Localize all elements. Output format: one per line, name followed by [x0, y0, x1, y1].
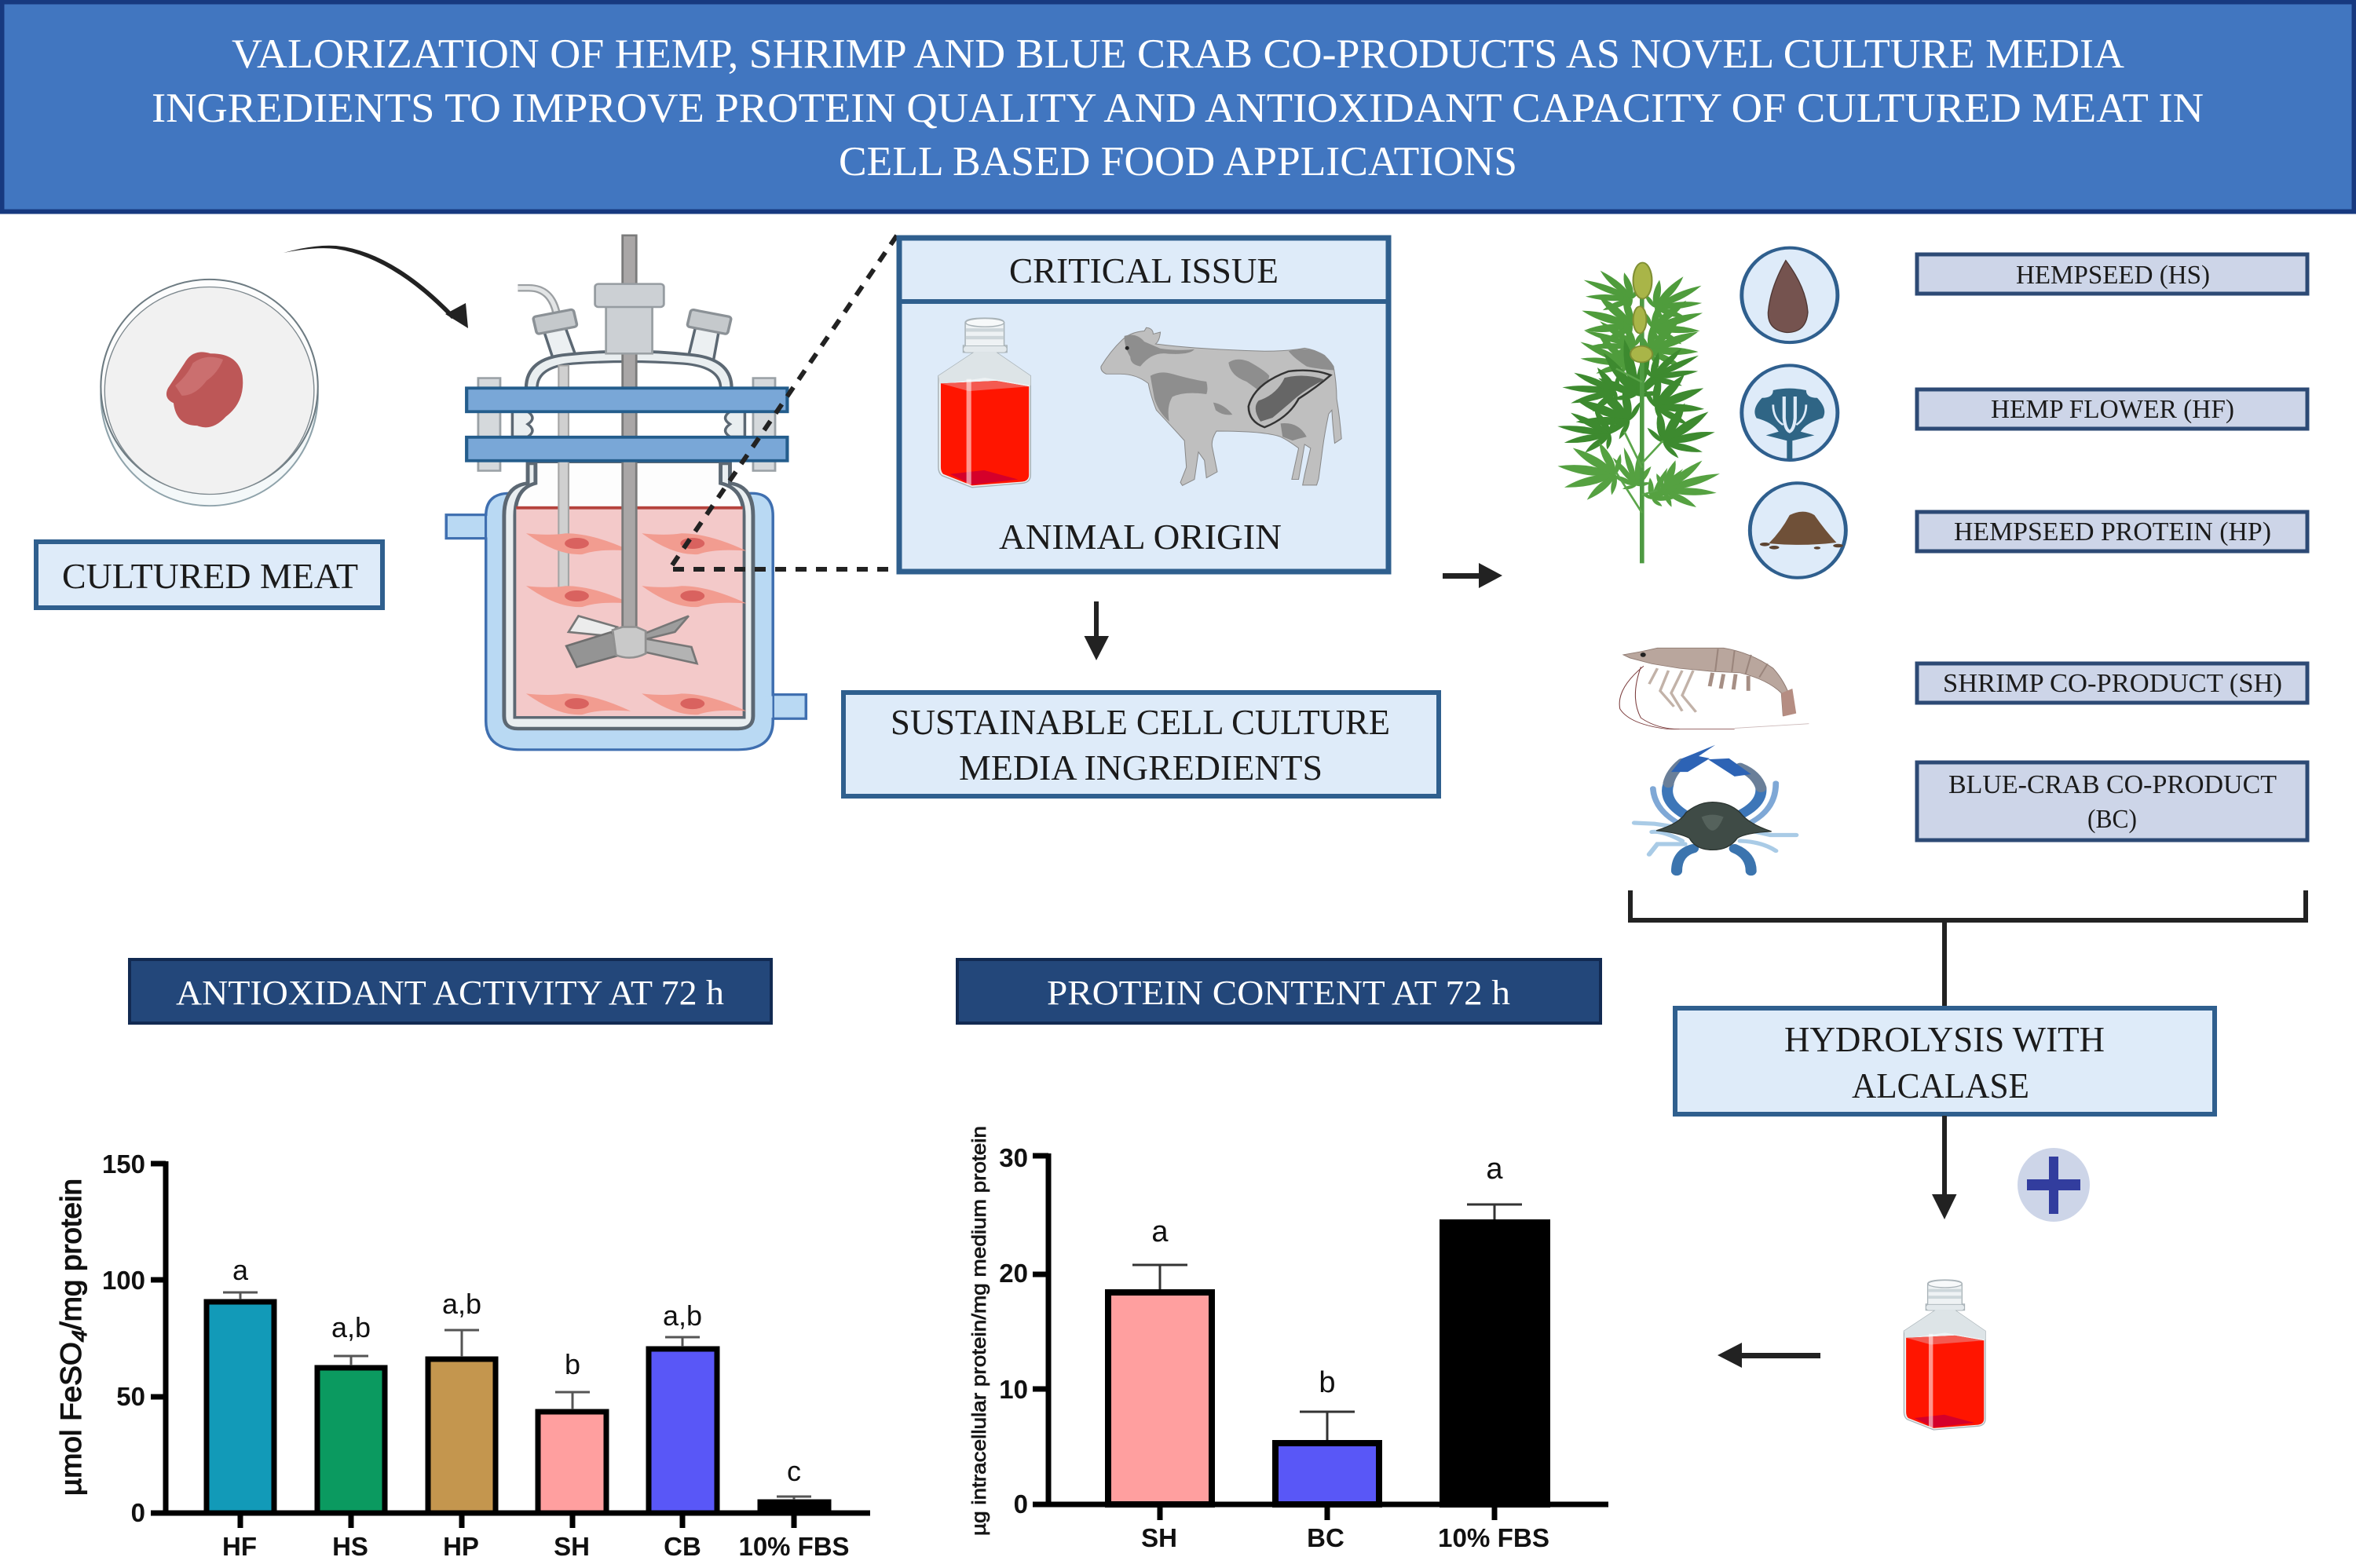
bracket joining sources	[1630, 890, 2306, 1007]
heading: critical issue: CRITICAL ISSUE	[1009, 250, 1279, 291]
y tick labels: 0	[1014, 1489, 1028, 1519]
y axis title: 4	[68, 1330, 91, 1342]
icon: petri dish with cultured meat	[101, 280, 318, 506]
axes	[1033, 1153, 1608, 1520]
y tick labels: 150	[102, 1150, 145, 1179]
icon: hempseed protein powder	[1750, 483, 1846, 578]
error bars	[223, 1292, 811, 1500]
label: hydrolysis with alcalase	[1675, 1008, 2215, 1114]
jacket	[446, 493, 806, 750]
dashed callout lines	[670, 236, 897, 569]
y tick labels: 30	[999, 1143, 1028, 1172]
significance letters: b	[565, 1348, 580, 1380]
label: shrimp co-product: SHRIMP CO-PRODUCT (SH)	[1943, 669, 2282, 698]
arrow: down to supplemented medium	[1932, 1116, 1957, 1219]
label: cultured meat	[36, 542, 382, 608]
icon: bioreactor	[446, 236, 806, 750]
arrow: down to sustainable ingredients	[1084, 601, 1109, 660]
y tick labels	[999, 1143, 1028, 1519]
label: shrimp co-product	[1917, 663, 2307, 703]
title banner: VALORIZATION OF HEMP, SHRIMP AND BLUE CRAB CO-PRODUCTS AS NOVEL CULTURE MEDIA	[232, 31, 2124, 77]
label: cultured meat: CULTURED MEAT	[62, 556, 358, 596]
significance letters: a,b	[663, 1299, 702, 1332]
label: hempseed protein: HEMPSEED PROTEIN (HP)	[1954, 517, 2271, 546]
heading: protein content	[957, 959, 1601, 1023]
flanges	[466, 388, 787, 411]
significance letters	[232, 1254, 801, 1487]
significance letters	[1151, 1153, 1503, 1399]
icon: supplemented medium bottle	[1904, 1280, 1985, 1430]
probe	[558, 366, 569, 590]
impeller	[569, 616, 617, 636]
shaft	[623, 236, 636, 631]
label: hempseed	[1917, 254, 2307, 294]
arrow: right to sources	[1443, 563, 1502, 588]
side port left	[518, 288, 557, 313]
y axis title: µg intracellular protein/mg medium protein	[968, 1126, 990, 1536]
significance letters: a	[1486, 1153, 1503, 1186]
x labels: SH	[1141, 1523, 1177, 1552]
x labels: CB	[664, 1532, 701, 1561]
x labels: HF	[222, 1532, 257, 1561]
label: blue-crab co-product: BLUE-CRAB CO-PRODUCT	[1948, 770, 2277, 799]
bar chart: antioxidant activity	[55, 1150, 870, 1561]
bolts	[478, 378, 500, 471]
y tick labels: 20	[999, 1259, 1028, 1288]
label: hemp flower	[1917, 389, 2307, 429]
label: hemp flower: HEMP FLOWER (HF)	[1991, 395, 2234, 424]
error bars	[1132, 1204, 1522, 1440]
bars	[1108, 1223, 1547, 1504]
title banner	[2, 2, 2354, 212]
y axis title: µmol FeSO	[55, 1348, 87, 1496]
label: hydrolysis with alcalase: ALCALASE	[1852, 1065, 2029, 1106]
x labels	[222, 1532, 850, 1561]
side port right	[689, 328, 719, 360]
x labels: HS	[332, 1532, 368, 1561]
arrow: left to results	[1718, 1343, 1820, 1368]
label: hempseed: HEMPSEED (HS)	[2016, 261, 2210, 290]
y tick labels: 10	[999, 1375, 1028, 1404]
title banner: INGREDIENTS TO IMPROVE PROTEIN QUALITY AND ANTIOXIDANT CAPACITY OF CULTURED MEAT IN	[152, 86, 2204, 131]
label: hempseed protein	[1917, 512, 2307, 551]
y tick labels: 0	[131, 1498, 145, 1527]
label: animal origin: ANIMAL ORIGIN	[999, 517, 1282, 557]
heading: antioxidant activity: ANTIOXIDANT ACTIVITY AT 72 h	[176, 974, 724, 1012]
title banner: CELL BASED FOOD APPLICATIONS	[839, 139, 1517, 185]
significance letters: a,b	[331, 1311, 371, 1343]
arrow: curved to bioreactor	[284, 246, 468, 328]
label: sustainable ingredients: SUSTAINABLE CELL CULTURE	[891, 702, 1390, 742]
heading: protein content: PROTEIN CONTENT AT 72 h	[1047, 974, 1510, 1012]
icon: cow with fetus	[1101, 327, 1341, 485]
significance letters: c	[787, 1455, 801, 1487]
significance letters: a	[1151, 1215, 1169, 1248]
clamps	[512, 411, 532, 437]
x labels: 10% FBS	[738, 1532, 850, 1561]
cells	[526, 533, 631, 554]
x labels: SH	[554, 1532, 590, 1561]
y tick labels	[102, 1150, 145, 1527]
significance letters: a	[232, 1254, 249, 1286]
x labels: HP	[443, 1532, 479, 1561]
icon: hempseed	[1742, 248, 1838, 342]
axes	[151, 1161, 870, 1528]
icon: shrimp	[1619, 648, 1809, 729]
central port	[606, 305, 653, 353]
dome	[526, 351, 732, 388]
x labels: 10% FBS	[1438, 1523, 1549, 1552]
y tick labels: 100	[102, 1266, 145, 1295]
icon: hemp plant	[1551, 260, 1732, 563]
heading: antioxidant activity	[130, 959, 771, 1023]
panel: critical issue	[897, 238, 1391, 572]
icon: plus	[2018, 1148, 2090, 1222]
medium	[516, 508, 743, 716]
bar chart: protein content	[968, 1126, 1608, 1552]
label: sustainable ingredients	[843, 693, 1439, 796]
significance letters: b	[1319, 1366, 1336, 1399]
label: blue-crab co-product	[1917, 762, 2307, 840]
x labels	[1141, 1523, 1549, 1552]
icon: culture medium bottle	[938, 318, 1030, 488]
significance letters: a,b	[442, 1288, 481, 1320]
x labels: BC	[1307, 1523, 1344, 1552]
icon: hemp flower	[1742, 365, 1838, 460]
icon: blue crab	[1634, 745, 1796, 871]
label: blue-crab co-product: (BC)	[2087, 805, 2137, 834]
vessel	[504, 463, 753, 729]
y tick labels: 50	[116, 1382, 145, 1411]
label: sustainable ingredients: MEDIA INGREDIENTS	[959, 747, 1323, 788]
label: hydrolysis with alcalase: HYDROLYSIS WITH	[1784, 1019, 2105, 1059]
y axis title: /mg protein	[55, 1179, 87, 1330]
bars	[207, 1302, 829, 1513]
